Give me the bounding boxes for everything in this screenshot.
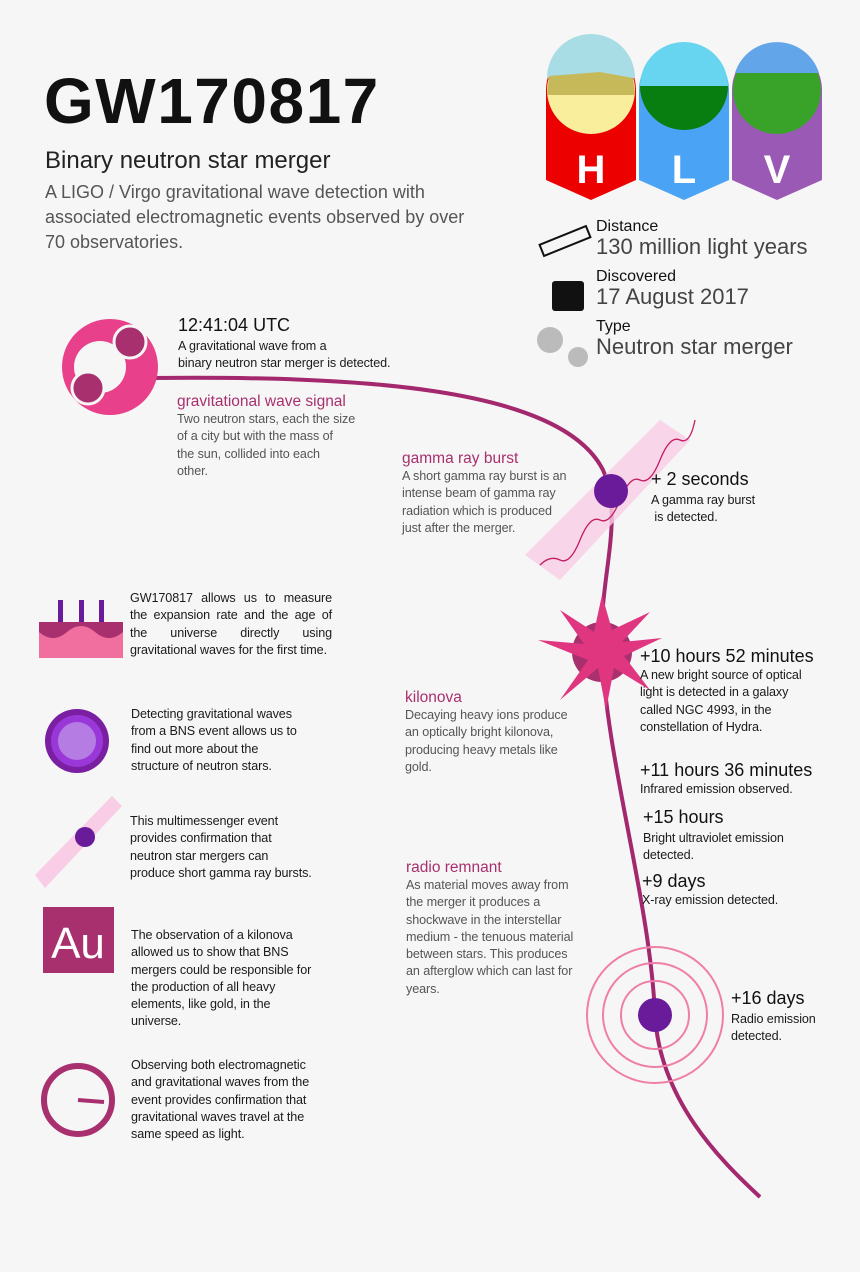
event: detection: A gravitational wave from a (178, 339, 326, 353)
radio remnant text: shockwave in the interstellar (406, 913, 561, 927)
gw signal text: Two neutron stars, each the size (177, 412, 355, 426)
gamma ray burst text: A short gamma ray burst is an (402, 469, 566, 483)
event: +16 days: detected. (731, 1029, 782, 1043)
icon: radio remnant rings (587, 947, 723, 1083)
text: the production of all heavy (131, 980, 275, 994)
event: +2 seconds (651, 469, 756, 524)
icon: kilonova star (538, 595, 662, 710)
facts: Type (596, 318, 631, 335)
radio remnant text: medium - the tenuous material (406, 930, 573, 944)
facts: 17 August 2017 (596, 284, 749, 309)
event: +10h52m: A new bright source of optical (640, 668, 802, 682)
text: provides confirmation that (130, 831, 272, 845)
event: +9 days (642, 871, 778, 907)
facts (596, 218, 808, 359)
event: +16 days (731, 988, 816, 1043)
event: +16 days: Radio emission (731, 1012, 816, 1026)
text: mergers could be responsible for (131, 963, 311, 977)
icon: gamma ray burst (525, 420, 695, 580)
text: from a BNS event allows us to (131, 724, 297, 738)
event: +10h52m (640, 646, 814, 734)
event: +15 hours: detected. (643, 848, 694, 862)
timeline curve (150, 378, 760, 1197)
facts: 130 million light years (596, 234, 808, 259)
radio remnant text (406, 859, 573, 996)
gamma ray burst text: gamma ray burst (402, 450, 518, 467)
radio remnant text: years. (406, 982, 440, 996)
text: This multimessenger event (130, 814, 278, 828)
radio remnant text: the merger it produces a (406, 895, 540, 909)
icon: HLV logo: L (672, 148, 696, 192)
gamma ray burst text: intense beam of gamma ray (402, 486, 556, 500)
intro text: A LIGO / Virgo gravitational wave detection with associated electromagnetic events observed by over 70 observatories. (45, 182, 464, 252)
icon: neutron star (45, 709, 109, 773)
kilonova text: producing heavy metals like (405, 743, 558, 757)
text: universe. (131, 1014, 181, 1028)
event: +2 seconds: + 2 seconds (651, 469, 749, 489)
event: +10h52m: constellation of Hydra. (640, 720, 762, 734)
gw signal text: gravitational wave signal (177, 393, 346, 410)
event: +2 seconds: is detected. (654, 510, 718, 524)
radio remnant text: between stars. This produces (406, 947, 567, 961)
icon: small gamma burst (35, 796, 122, 888)
icon: type circles (537, 327, 588, 367)
gamma ray burst text: just after the merger. (402, 521, 515, 535)
kilonova text: Decaying heavy ions produce (405, 708, 568, 722)
icon: HLV logo: V (764, 148, 791, 192)
icon: binary stars (62, 319, 158, 415)
text: same speed as light. (131, 1127, 245, 1141)
gw signal text (177, 393, 355, 478)
text: Detecting gravitational waves (131, 707, 292, 721)
icon: Au: Au (51, 919, 105, 968)
text: event provides confirmation that (131, 1093, 306, 1107)
left panel texts: GW170817 allows us to measure the expansion rate and the age of the universe directly using gravitational waves for the first time. (130, 591, 332, 657)
title: GW170817 (44, 65, 380, 137)
event: detection (178, 315, 390, 370)
icon: HLV logo: H (577, 148, 605, 192)
kilonova text: an optically bright kilonova, (405, 725, 553, 739)
event: detection: binary neutron star merger is detected. (178, 356, 390, 370)
event: +9 days: +9 days (642, 871, 706, 891)
text: produce short gamma ray bursts. (130, 866, 312, 880)
subtitle: Binary neutron star merger (45, 147, 330, 174)
icon: HLV logo (546, 34, 822, 200)
event: +16 days: +16 days (731, 988, 805, 1008)
event: +15 hours: +15 hours (643, 807, 724, 827)
facts: Discovered (596, 268, 676, 285)
radio remnant text: radio remnant (406, 859, 502, 876)
facts: Neutron star merger (596, 334, 793, 359)
text: allowed us to show that BNS (131, 945, 289, 959)
event: +11h36m (640, 760, 812, 796)
text: and gravitational waves from the (131, 1075, 309, 1089)
text: The observation of a kilonova (131, 928, 293, 942)
event: detection: 12:41:04 UTC (178, 315, 290, 335)
gw signal text: the sun, collided into each (177, 447, 320, 461)
event: +15 hours: Bright ultraviolet emission (643, 831, 784, 845)
kilonova text: gold. (405, 760, 432, 774)
text: structure of neutron stars. (131, 759, 272, 773)
icon: speedometer (44, 1066, 112, 1134)
gw signal text: other. (177, 464, 208, 478)
event: +2 seconds: A gamma ray burst (651, 493, 755, 507)
icon: ruler (540, 226, 590, 256)
text: gravitational waves travel at the (131, 1110, 304, 1124)
gamma ray burst text: radiation which is produced (402, 504, 552, 518)
gamma ray burst text (402, 450, 566, 535)
icon: calendar (552, 281, 584, 311)
event: +15 hours (643, 807, 784, 862)
radio remnant text: an afterglow which can last for (406, 964, 572, 978)
kilonova text: kilonova (405, 689, 462, 706)
event: +11h36m: Infrared emission observed. (640, 782, 793, 796)
event: +10h52m: +10 hours 52 minutes (640, 646, 814, 666)
gw signal text: of a city but with the mass of (177, 429, 333, 443)
text: elements, like gold, in the (131, 997, 270, 1011)
kilonova text (405, 689, 568, 774)
text: Observing both electromagnetic (131, 1058, 306, 1072)
event: +11h36m: +11 hours 36 minutes (640, 760, 812, 780)
event: +10h52m: light is detected in a galaxy (640, 685, 788, 699)
facts: Distance (596, 218, 658, 235)
text: find out more about the (131, 742, 258, 756)
radio remnant text: As material moves away from (406, 878, 568, 892)
event: +10h52m: called NGC 4993, in the (640, 703, 771, 717)
icon: Au (43, 907, 114, 973)
text: neutron star mergers can (130, 849, 268, 863)
icon: cake (39, 600, 123, 658)
event: +9 days: X-ray emission detected. (642, 893, 778, 907)
